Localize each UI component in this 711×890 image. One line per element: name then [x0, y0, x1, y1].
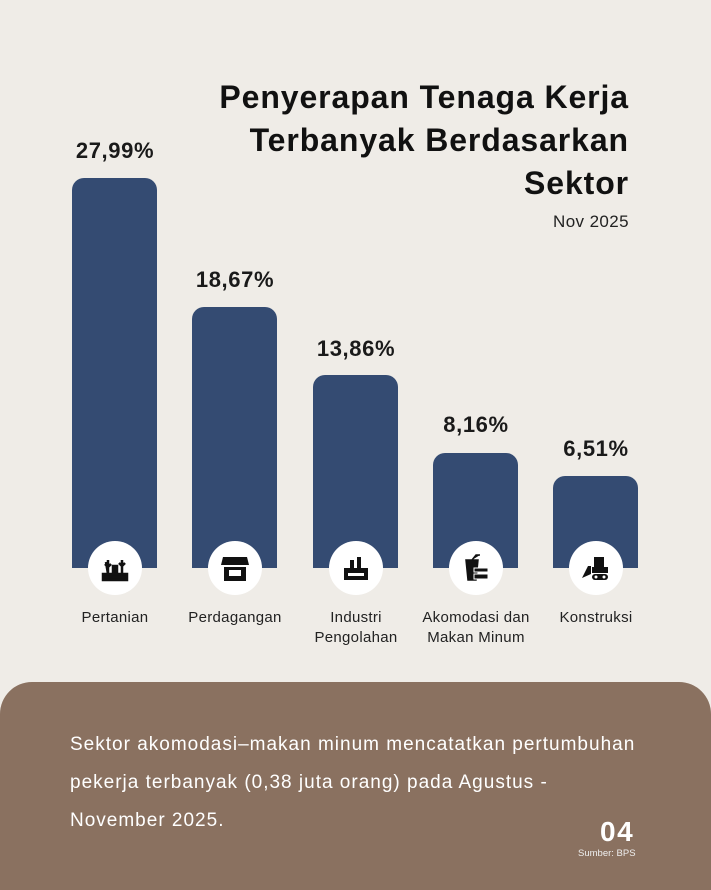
value: 8,16%: 8,16%	[443, 412, 509, 437]
label: Industri Pengolahan	[314, 609, 398, 646]
label: Akomodasi	[422, 609, 530, 646]
summary text: Sektor akomodasi–makan minum mencatatkan pertumbuhan	[70, 734, 635, 755]
title: Terbanyak Berdasarkan	[250, 122, 629, 158]
bar: Akomodasi	[433, 453, 518, 568]
icon: shop	[208, 541, 262, 595]
bar: Pertanian	[72, 178, 157, 568]
value: 18,67%: 18,67%	[196, 267, 274, 292]
label: Perdagangan: Perdagangan	[188, 609, 282, 626]
title	[219, 79, 629, 201]
icon: bulldozer	[569, 541, 623, 595]
value: 6,51%: 6,51%	[563, 436, 629, 461]
label: Akomodasi: Akomodasi dan	[422, 609, 530, 626]
icon: food	[449, 541, 503, 595]
label: Industri Pengolahan: Industri	[330, 609, 382, 626]
title: Penyerapan Tenaga Kerja	[219, 79, 629, 115]
icon: factory	[329, 541, 383, 595]
label: Industri Pengolahan: Pengolahan	[314, 629, 398, 646]
summary text: November 2025.	[70, 810, 224, 831]
icon: plants	[88, 541, 142, 595]
panel: summary	[0, 682, 711, 890]
date: Nov 2025	[553, 212, 629, 231]
title: Sektor	[524, 165, 629, 201]
bar: Konstruksi	[553, 476, 638, 568]
source: Sumber: BPS	[578, 848, 636, 859]
label: Akomodasi: Makan Minum	[427, 629, 525, 646]
bar: Industri	[313, 375, 398, 568]
summary text	[70, 734, 635, 831]
summary text: pekerja terbanyak (0,38 juta orang) pada Agustus -	[70, 772, 548, 793]
bar: Perdagangan	[192, 307, 277, 568]
label: Pertanian: Pertanian	[82, 609, 148, 626]
value: 13,86%: 13,86%	[317, 336, 395, 361]
bar chart	[72, 138, 638, 646]
page number: 04	[600, 816, 634, 847]
label: Konstruksi: Konstruksi	[559, 609, 633, 626]
value: 27,99%: 27,99%	[76, 138, 154, 163]
